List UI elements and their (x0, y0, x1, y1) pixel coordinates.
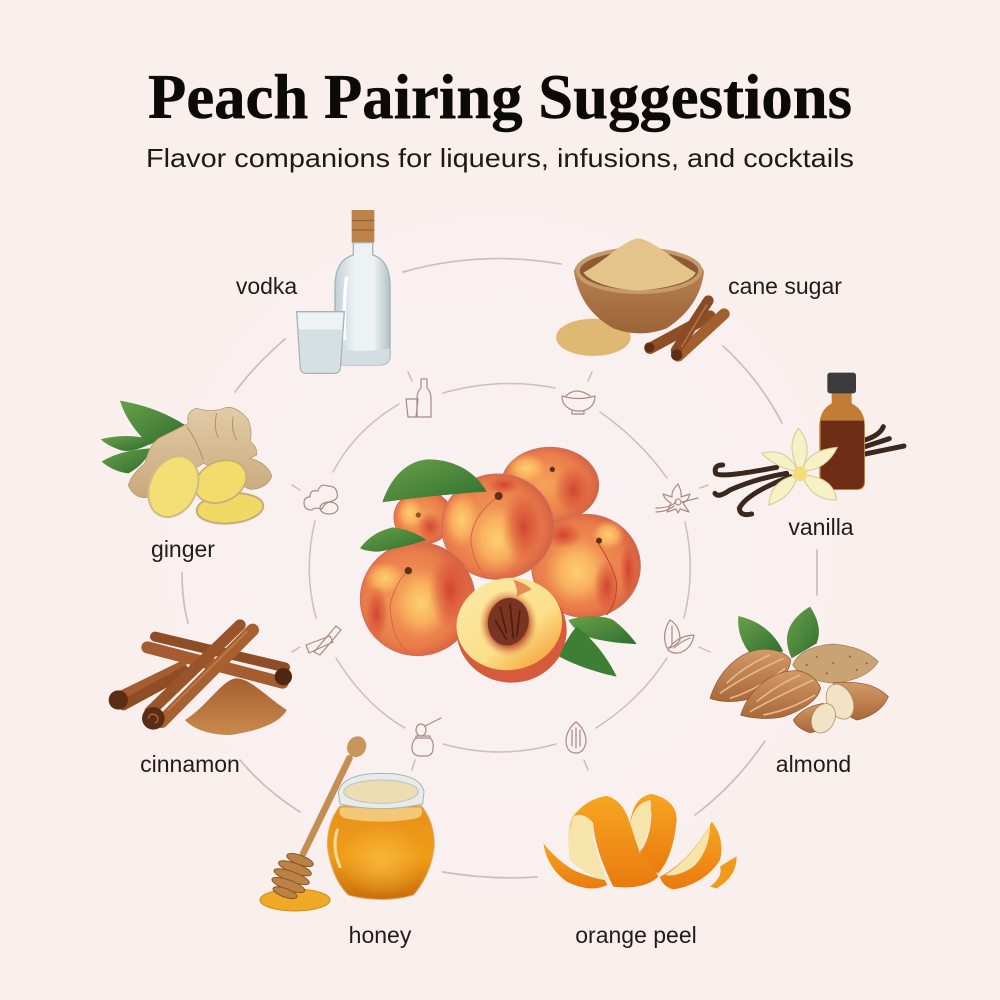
jar body (327, 806, 434, 899)
outer connector ring (182, 259, 817, 878)
illustration: orange peel (543, 794, 737, 889)
shot glass (297, 312, 344, 373)
jar rim (338, 773, 424, 809)
peach: center (442, 474, 554, 579)
subtitle: Flavor companions for liqueurs, infusions, and cocktails (146, 143, 854, 173)
pale inner left (568, 810, 607, 880)
sugar heap (583, 238, 696, 291)
label: honey: honey (349, 922, 412, 948)
inner icon: vodka bottle (406, 379, 431, 417)
leaf: right lower (559, 627, 617, 677)
illustration: honey jar and dipper (260, 733, 434, 911)
dipper handle (303, 758, 349, 853)
leaves (120, 401, 185, 445)
peach: right (532, 514, 640, 618)
dipper head (270, 851, 315, 901)
label: ginger: ginger (151, 536, 215, 562)
right piece (660, 822, 721, 889)
inner icon: cinnamon sticks (306, 626, 341, 655)
illustration: ginger (101, 401, 272, 526)
shelled almond (793, 644, 878, 683)
almond left (710, 649, 791, 702)
illustration: vodka bottle and glass (297, 210, 390, 373)
inner icon: almonds (665, 620, 694, 653)
title: Peach Pairing Suggestions (148, 61, 852, 132)
peach: back right (501, 447, 599, 523)
inner icon: vanilla flower (656, 484, 698, 513)
illustration: cane sugar bowl with cinnamon (556, 238, 724, 361)
flower (762, 428, 837, 505)
peach pit (483, 594, 533, 649)
label: orange peel: orange peel (575, 922, 697, 948)
inner connector ring (292, 372, 710, 770)
peach: left (360, 542, 475, 656)
almond centre (741, 671, 821, 719)
label: almond: almond (776, 751, 851, 777)
pods left (715, 465, 790, 515)
bowl (574, 247, 704, 333)
main strip (569, 796, 658, 887)
left tail (543, 843, 607, 888)
leaf: large top (382, 459, 487, 502)
small tail (710, 857, 737, 888)
second loop (630, 794, 677, 873)
label: cinnamon: cinnamon (140, 751, 240, 777)
puddle (260, 889, 330, 911)
powder (185, 678, 287, 735)
slices (195, 490, 265, 526)
inner icon: honey jar and dipper (412, 718, 441, 756)
root (128, 407, 272, 498)
inner icon: ginger (304, 485, 338, 514)
cinnamon sticks (650, 301, 724, 356)
illustration: central peaches (360, 447, 640, 683)
label: vodka: vodka (236, 273, 297, 299)
inner icon: almond outline (566, 722, 586, 753)
spilled sugar (556, 319, 631, 356)
bottle (819, 393, 865, 490)
illustration: cinnamon sticks and powder (109, 625, 292, 735)
pods behind bottle (865, 427, 904, 454)
bottle cork (352, 210, 374, 243)
leaf: right upper (568, 616, 637, 644)
label: vanilla: vanilla (788, 514, 854, 540)
almond small (793, 703, 833, 733)
back sticks (117, 637, 285, 705)
peach: cut half (449, 569, 570, 683)
label: cane sugar: cane sugar (728, 273, 842, 299)
peach: back left (394, 491, 453, 544)
illustration: vanilla extract and pods (715, 373, 904, 515)
bottle body (335, 243, 390, 365)
inner icon: sugar bowl (562, 391, 595, 414)
illustration: almonds (710, 607, 888, 737)
front sticks (150, 625, 253, 722)
almond broken right (833, 682, 888, 720)
leaves (738, 616, 783, 653)
leaf: small left (360, 527, 427, 552)
